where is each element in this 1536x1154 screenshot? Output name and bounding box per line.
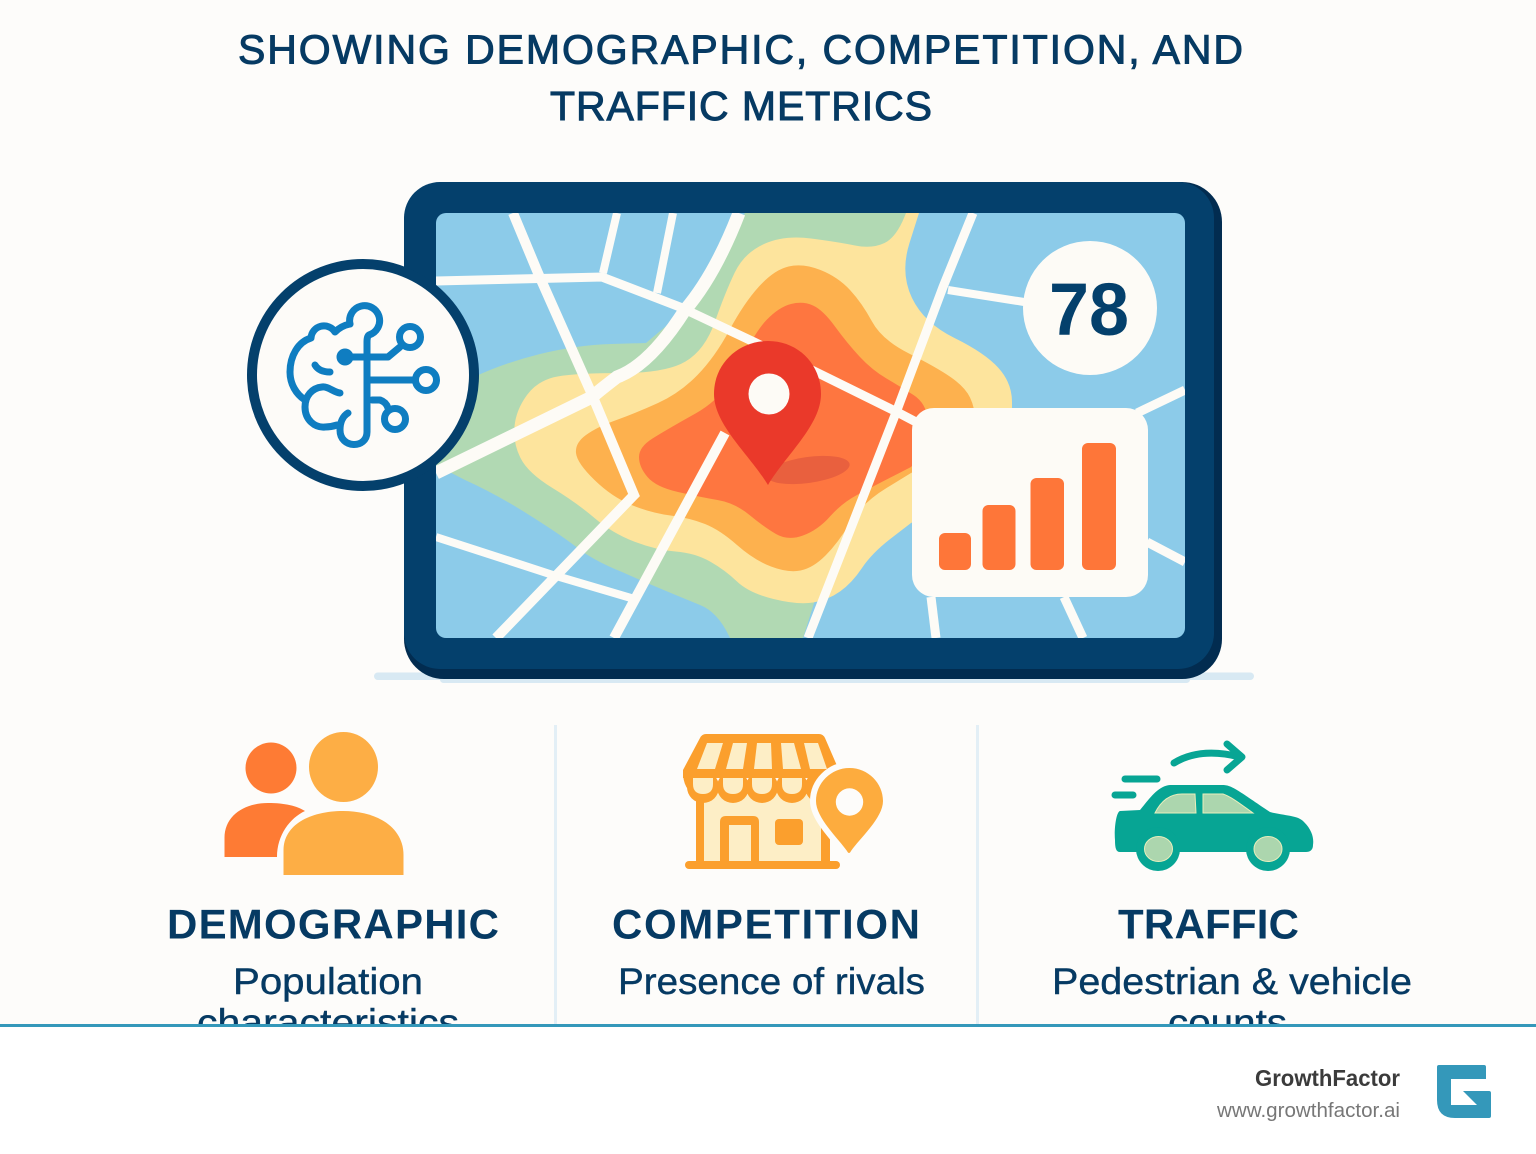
footer url: www.growthfactor.ai xyxy=(1216,1100,1400,1122)
footer brand name: GrowthFactor xyxy=(1255,1065,1400,1091)
title: TRAFFIC METRICS xyxy=(550,83,932,129)
column dividers xyxy=(554,725,979,1025)
heading: demographic: DEMOGRAPHIC xyxy=(167,900,499,948)
score badge: 78 xyxy=(1049,268,1129,351)
bar chart card xyxy=(912,408,1148,597)
title xyxy=(238,26,1243,129)
heatmap: orange zone xyxy=(576,265,975,571)
heading: traffic: TRAFFIC xyxy=(1118,900,1299,948)
map pin xyxy=(714,341,851,489)
icon: AI brain badge xyxy=(252,264,474,486)
title: SHOWING DEMOGRAPHIC, COMPETITION, AND xyxy=(238,26,1243,72)
map xyxy=(436,213,1185,638)
text: traffic description xyxy=(1052,961,1412,1043)
text: demographic description: characteristics xyxy=(197,1002,459,1043)
awning stripes xyxy=(693,743,827,794)
icon: GrowthFactor logo xyxy=(1437,1065,1491,1118)
text: traffic description: Pedestrian & vehicle xyxy=(1052,961,1412,1002)
panel: tablet map xyxy=(404,182,1222,679)
panel: demographic xyxy=(167,732,499,1043)
footer xyxy=(0,1024,1536,1154)
text: competition description: Presence of rivals xyxy=(618,961,925,1002)
tablet shadow xyxy=(374,672,1254,683)
icon: store with pin xyxy=(683,734,883,869)
score badge xyxy=(1023,241,1157,375)
heatmap: green zone xyxy=(436,213,906,638)
heatmap: yellow zone xyxy=(514,213,1012,603)
text: traffic description: counts xyxy=(1168,1002,1287,1043)
panel: competition xyxy=(612,734,925,1002)
icon: people xyxy=(224,732,404,875)
tablet frame xyxy=(404,182,1222,679)
text: demographic description xyxy=(197,961,459,1043)
panel: traffic xyxy=(1052,744,1412,1043)
icon: car xyxy=(1115,744,1313,871)
text: demographic description: Population xyxy=(233,961,423,1002)
heading: competition: COMPETITION xyxy=(612,900,920,948)
roads xyxy=(436,213,1185,638)
heatmap: red zone xyxy=(639,303,930,538)
